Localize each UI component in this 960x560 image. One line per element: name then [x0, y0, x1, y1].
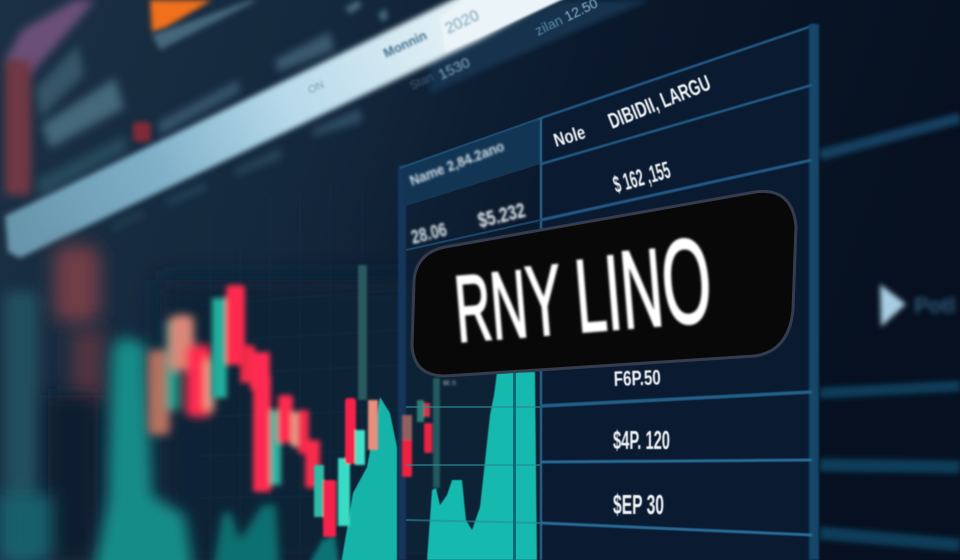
band label: Monnin — [381, 28, 429, 61]
far-left bottom teal — [0, 495, 52, 560]
blurred labels — [158, 80, 240, 135]
table vertical — [540, 118, 542, 560]
left value one: 28.06 — [409, 220, 449, 249]
right table edge — [809, 24, 819, 560]
blurred red blocks — [54, 245, 100, 323]
darker lower chart background — [160, 280, 540, 560]
pill text: RNY LINO — [449, 213, 716, 368]
teal peaks — [427, 372, 537, 560]
band number: 2020 — [443, 7, 482, 38]
table labels — [407, 70, 714, 520]
dim teal area — [212, 505, 280, 560]
left value two: $5.232 — [476, 199, 528, 233]
white header band — [5, 0, 600, 258]
sub number: 1530 — [436, 54, 473, 84]
blue chart axis line — [398, 165, 406, 560]
blue-teal far left column — [4, 292, 38, 560]
pill shape — [412, 191, 796, 376]
left panel header — [402, 118, 541, 206]
red vertical bar — [5, 60, 31, 195]
table grid — [400, 24, 960, 560]
candlestick chart — [148, 285, 440, 537]
bright teal area right — [406, 372, 540, 560]
dark gap — [48, 395, 98, 560]
blurred label: Potl — [914, 293, 956, 318]
blue strip under white band — [430, 0, 650, 94]
left grey slabs — [36, 45, 84, 118]
column label: DIBIDII, LARGU — [605, 70, 714, 134]
row value 2: F6P.50 — [613, 366, 661, 391]
small tick label under pill: $E.S — [443, 381, 456, 387]
row lines — [541, 85, 812, 164]
column label note: Nole — [551, 122, 588, 152]
vertical green indicator — [358, 265, 367, 400]
right extended lines — [820, 118, 960, 155]
grey block under orange — [152, 0, 258, 50]
row value 3: $4P. 120 — [613, 425, 670, 455]
black label pill — [412, 191, 796, 376]
blurred teal column — [92, 336, 195, 560]
bright teal area left — [340, 397, 397, 560]
table outer top — [541, 25, 815, 118]
dim teal base — [306, 535, 340, 560]
blurred left columns — [0, 245, 280, 560]
dark divider in teal — [513, 372, 516, 560]
band shape — [5, 0, 600, 258]
orange block — [150, 0, 212, 32]
table panel background — [541, 25, 815, 560]
play icon and label — [880, 284, 956, 327]
purple bar — [5, 0, 95, 75]
play triangle — [880, 284, 906, 327]
row value 4: $EP 30 — [613, 489, 664, 520]
candles blurred — [148, 315, 214, 435]
row value 1: $ 162 ,155 — [610, 157, 673, 199]
band small label: ON — [306, 79, 326, 97]
faint chart grid — [200, 175, 400, 560]
sub label: Stan — [407, 70, 436, 93]
red dot — [133, 122, 151, 142]
chart grid lines over teal — [406, 407, 540, 523]
blurred top-left panels — [5, 0, 388, 231]
band bright right end — [440, 0, 572, 52]
header name: Name 2,84.2ano — [407, 138, 507, 190]
